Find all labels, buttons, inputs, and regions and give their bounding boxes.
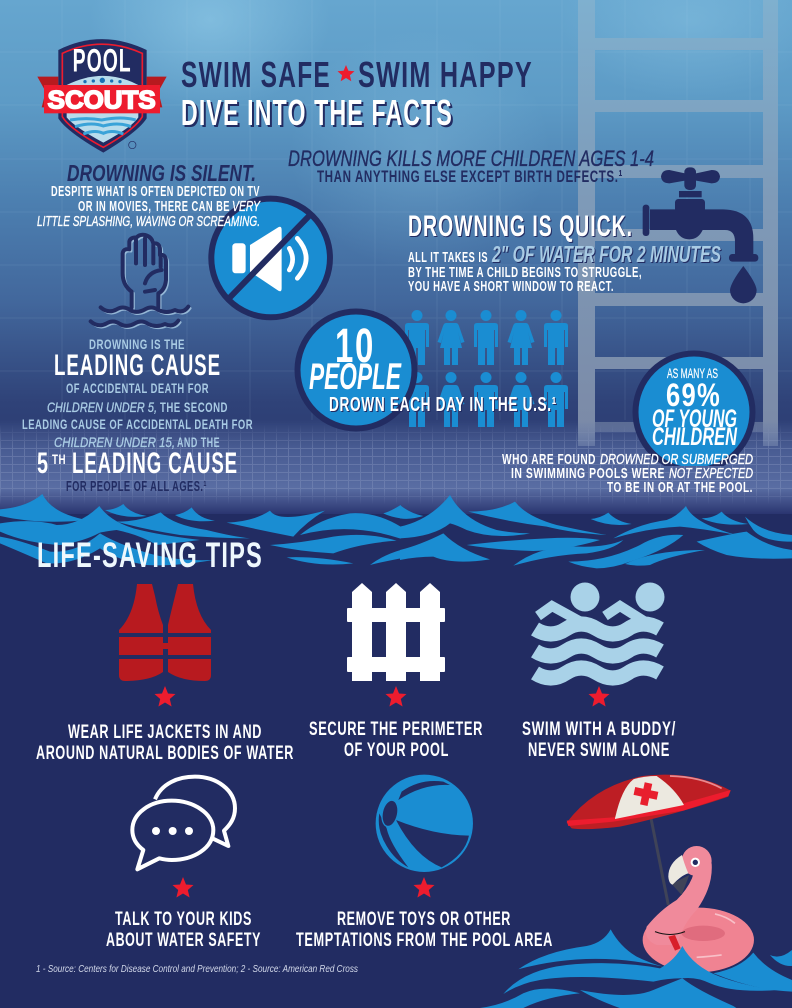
tip: talk to your kids: ABOUT WATER SAFETY <box>106 930 261 951</box>
text block: drowning is quick <box>408 210 721 295</box>
text block: drowning is silent <box>37 160 261 230</box>
text block: leading cause: CHILDREN UNDER 5, <box>47 399 157 415</box>
icon: star <box>414 877 434 898</box>
text block: leading cause: THE SECOND <box>160 399 228 415</box>
tip: secure the perimeter: OF YOUR POOL <box>344 740 449 761</box>
icon: life jacket <box>119 584 211 681</box>
text block: leading cause: TH <box>52 451 66 467</box>
badge circle <box>636 354 752 470</box>
text block: drowning is quick: ALL IT TAKES IS <box>408 250 488 266</box>
callout: 69 percent <box>502 354 753 496</box>
icon: beach ball <box>376 775 473 872</box>
callout: 10 people: PEOPLE <box>309 356 402 397</box>
tip: life jackets: WEAR LIFE JACKETS IN AND <box>68 722 262 743</box>
text block: drowning is silent: DESPITE WHAT IS OFTEN DEPICTED ON TV <box>51 184 260 200</box>
title: Swim Safe Swim Happy: SWIM HAPPY <box>358 54 533 95</box>
tip: swim with a buddy <box>522 582 676 761</box>
text block: leading cause: LEADING CAUSE <box>54 349 221 382</box>
text block: leading cause: 5 <box>37 447 49 480</box>
illustration: flamingo float, umbrella and waves <box>480 775 792 1008</box>
foreground waves <box>480 929 792 1008</box>
tip: talk to your kids <box>106 777 261 951</box>
icon: raised hand in water <box>91 235 190 328</box>
waves: section divider <box>0 494 792 568</box>
heading: Dive into the facts: DIVE INTO THE FACTS <box>181 92 453 133</box>
text block: leading cause: FOR PEOPLE OF ALL AGES.¹ <box>66 479 207 495</box>
tip: remove toys <box>296 775 553 951</box>
text block: drowning is silent: VERY <box>232 199 261 215</box>
title: Swim Safe Swim Happy <box>181 54 533 95</box>
icon: title star <box>338 65 354 81</box>
text block: drowning kills more children: THAN ANYTHING ELSE EXCEPT BIRTH DEFECTS.¹ <box>317 167 623 186</box>
pool ladder <box>578 0 778 446</box>
heading: life-saving tips: LIFE-SAVING TIPS <box>37 536 263 575</box>
text block: leading cause: AND THE <box>177 434 220 450</box>
umbrella <box>567 775 731 905</box>
pictogram: ten people <box>405 310 568 427</box>
text block: drowning kills more children: DROWNING KILLS MORE CHILDREN AGES 1-4 <box>288 146 654 171</box>
callout: 69 percent: NOT EXPECTED <box>669 466 753 482</box>
tip: life jackets <box>36 584 294 764</box>
text block: leading cause: LEADING CAUSE <box>72 447 238 480</box>
callout: 10 people: DROWN EACH DAY IN THE U.S.¹ <box>329 394 557 416</box>
icon: star <box>172 877 194 898</box>
callout: 69 percent: 69% <box>666 377 721 413</box>
text block: leading cause <box>22 336 253 495</box>
text block: leading cause: LEADING CAUSE OF ACCIDENTAL DEATH FOR <box>22 416 253 432</box>
callout: 69 percent: AS MANY AS <box>667 365 718 381</box>
text block: leading cause: OF ACCIDENTAL DEATH FOR <box>66 380 209 396</box>
logo: Pool Scouts shield: POOL <box>73 43 132 79</box>
text block: drowning is quick: YOU HAVE A SHORT WINDOW TO REACT. <box>408 279 614 295</box>
icon: swimmers <box>535 582 664 678</box>
text block: drowning is quick: DROWNING IS QUICK. <box>408 210 633 243</box>
text block: drowning is silent: DROWNING IS SILENT. <box>67 160 256 186</box>
callout: 69 percent: WHO ARE FOUND <box>502 452 596 468</box>
text block: drowning is silent: OR IN MOVIES, THERE CAN BE <box>78 199 230 215</box>
tip: talk to your kids: TALK TO YOUR KIDS <box>115 909 252 930</box>
icon: star <box>154 686 176 706</box>
icon: muted speaker <box>211 199 330 317</box>
tip: remove toys: TEMPTATIONS FROM THE POOL AREA <box>296 930 553 951</box>
tip: remove toys: REMOVE TOYS OR OTHER <box>337 909 511 930</box>
callout: 69 percent: IN SWIMMING POOLS WERE <box>511 466 665 482</box>
tip: swim with a buddy: SWIM WITH A BUDDY/ <box>522 719 676 740</box>
callout: 69 percent: OF YOUNG <box>652 405 737 433</box>
title: Swim Safe Swim Happy: SWIM SAFE <box>181 54 331 95</box>
logo: Pool Scouts shield: SCOUTS <box>48 87 156 114</box>
tip: swim with a buddy: NEVER SWIM ALONE <box>528 740 670 761</box>
icon: speech bubbles <box>132 777 235 869</box>
text block: drowning is silent: LITTLE SPLASHING, WAVING OR SCREAMING. <box>37 214 260 230</box>
icon: star <box>386 686 406 706</box>
tip: life jackets: AROUND NATURAL BODIES OF WATER <box>36 743 294 764</box>
callout: 69 percent: CHILDREN <box>652 423 738 451</box>
tip: secure the perimeter <box>309 583 483 761</box>
icon: star <box>588 686 610 706</box>
text block: leading cause: DROWNING IS THE <box>89 336 185 352</box>
logo: Pool Scouts shield <box>37 39 167 153</box>
flamingo float <box>643 846 754 972</box>
icon: picket fence <box>347 583 445 681</box>
callout: 10 people: 10 <box>335 320 375 373</box>
text block: drowning is quick: BY THE TIME A CHILD BEGINS TO STRUGGLE, <box>408 265 642 281</box>
tiled pool floor <box>0 426 792 604</box>
tip: secure the perimeter: SECURE THE PERIMETER <box>309 719 483 740</box>
callout: 10 people <box>298 312 557 428</box>
text block: drowning kills more children <box>288 146 654 186</box>
icon: faucet and water drop <box>643 167 758 303</box>
text block: leading cause: CHILDREN UNDER 15, <box>54 434 175 450</box>
footnote: sources: 1 - Source: Centers for Disease Control and Prevention; 2 - Source: American Red Cross <box>36 964 358 975</box>
